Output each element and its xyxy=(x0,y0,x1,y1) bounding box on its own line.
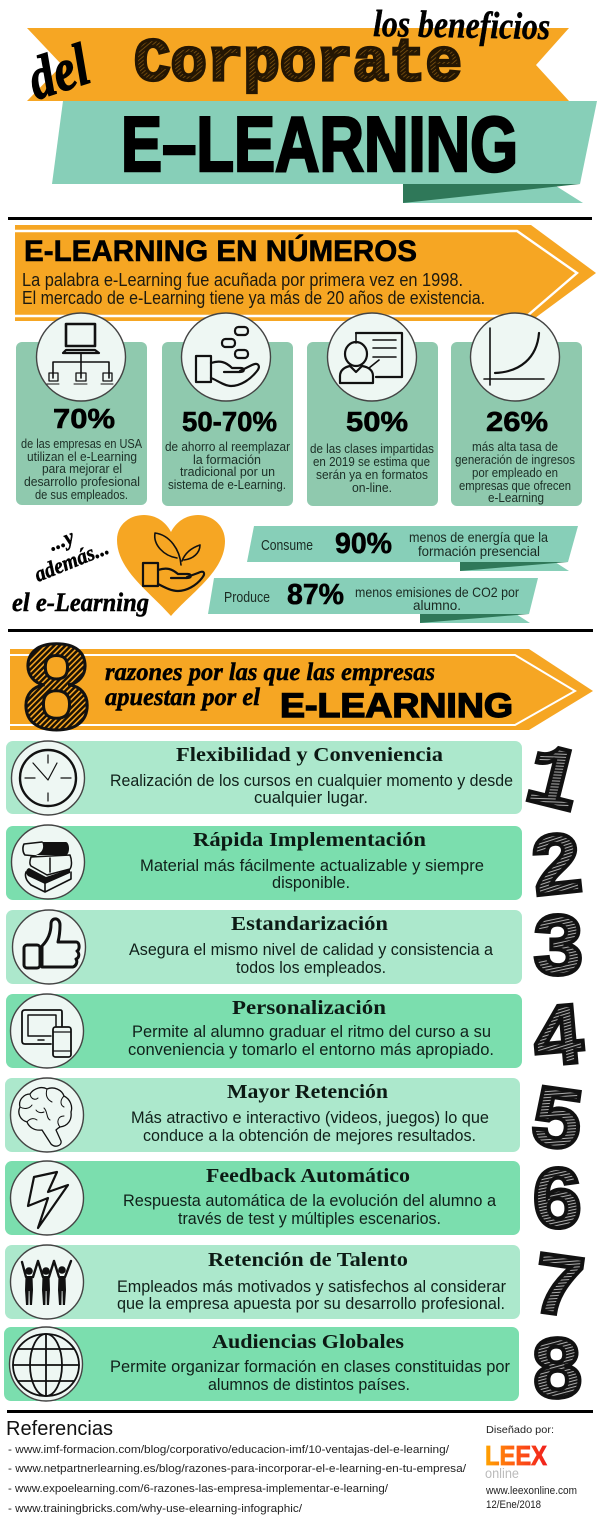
description xyxy=(165,440,290,492)
ribbon: produce 87%: 87% xyxy=(287,579,344,611)
description: Más atractivo e interactivo (videos, juegos) lo que xyxy=(131,1109,489,1127)
icon: hand holding plant xyxy=(143,533,204,591)
ribbon: consume 90% xyxy=(247,526,578,571)
icon: cheering team xyxy=(10,1245,84,1319)
orange ribbon xyxy=(27,28,569,101)
number 3: 3 xyxy=(532,902,584,1001)
icon: clock xyxy=(12,741,84,815)
reference list: - www.expoelearning.com/6-razones-las-empresa-implementar-e-learning/ xyxy=(8,1483,389,1495)
percentage: 50% xyxy=(346,406,408,437)
section heading script: apuestan por el xyxy=(105,684,260,711)
heading: Mayor Retención xyxy=(227,1081,388,1103)
section heading script xyxy=(105,659,435,711)
number 2: 2 xyxy=(526,818,588,922)
description: más alta tasa de xyxy=(472,440,558,454)
icon: brain xyxy=(10,1078,84,1152)
divider xyxy=(7,1410,593,1413)
icon: devices xyxy=(10,994,84,1068)
description xyxy=(131,1109,489,1145)
description: Realización de los cursos en cualquier momento y desde xyxy=(110,772,513,790)
section: 8 razones xyxy=(10,619,593,755)
logo: LEEX online: LEEX xyxy=(485,1440,547,1471)
description: Empleados más motivados y satisfechos al considerar xyxy=(117,1278,506,1296)
percentage: 50-70% xyxy=(182,406,277,437)
description xyxy=(117,1278,506,1313)
designer credit: Diseñado por: xyxy=(486,1425,554,1436)
reason 5 xyxy=(5,1078,520,1152)
description: todos los empleados. xyxy=(236,959,386,977)
reference list: - www.trainingbricks.com/why-use-elearning-infographic/ xyxy=(8,1503,303,1515)
orange arrow banner xyxy=(10,649,593,730)
ribbon: consume 90%: 90% xyxy=(335,528,392,560)
description xyxy=(129,941,494,977)
icon: teacher at board xyxy=(328,313,416,401)
dark ribbon fold xyxy=(403,184,580,203)
intro text: La palabra e-Learning fue acuñada por primera vez en 1998. xyxy=(22,270,463,290)
description: disponible. xyxy=(272,874,350,892)
description: en 2019 se estima que xyxy=(313,455,430,469)
designer credit: 12/Ene/2018 xyxy=(486,1499,541,1511)
reason 8 xyxy=(4,1327,519,1401)
logo: LEEX online: online xyxy=(485,1466,519,1481)
heading: Rápida Implementación xyxy=(193,829,426,851)
section: e-learning en numeros xyxy=(15,225,596,321)
description: de las clases impartidas xyxy=(310,442,434,456)
heading: Personalización xyxy=(232,997,386,1019)
ribbon: produce 87%: Produce xyxy=(224,590,270,606)
title: del: del xyxy=(20,31,97,112)
number 6: 6 xyxy=(531,1155,583,1254)
references xyxy=(6,1418,467,1515)
reference list: - www.imf-formacion.com/blog/corporativo/educacion-imf/10-ventajas-del-e-learning/ xyxy=(8,1444,450,1456)
designer credit: www.leexonline.com xyxy=(485,1485,577,1497)
heading: Retención de Talento xyxy=(208,1249,408,1271)
description xyxy=(128,1023,494,1059)
number 4: 4 xyxy=(528,990,589,1093)
reason 4 xyxy=(6,994,522,1068)
description: de las empresas en USA xyxy=(21,437,143,451)
description xyxy=(310,442,434,495)
script: ...y además... el e-Learning: ...y xyxy=(45,524,77,556)
description xyxy=(455,440,575,505)
arrow white inner line xyxy=(10,655,575,725)
stat card: 26% xyxy=(451,313,582,506)
description: de ahorro al reemplazar xyxy=(165,440,290,454)
ribbon: produce 87% xyxy=(208,578,538,623)
description: que la empresa apuesta por su desarrollo profesional. xyxy=(117,1295,505,1313)
description: sistema de e-Learning. xyxy=(168,478,286,492)
icon: lightning bolt xyxy=(10,1161,84,1235)
description xyxy=(110,1358,510,1394)
description: Respuesta automática de la evolución del alumno a xyxy=(123,1192,497,1210)
reference list: - www.netpartnerlearning.es/blog/razones-para-incorporar-el-e-learning-en-tu-empresa/ xyxy=(8,1463,467,1475)
heading: Flexibilidad y Conveniencia xyxy=(176,744,443,766)
title banner xyxy=(20,3,597,203)
references heading: Referencias xyxy=(6,1418,113,1440)
divider xyxy=(8,217,592,220)
description xyxy=(140,857,484,892)
script: ...y además... el e-Learning: el e-Learning xyxy=(12,588,149,617)
title: los beneficios: los beneficios xyxy=(373,3,551,48)
description: e-Learning xyxy=(488,491,544,505)
heart with plant icon xyxy=(117,515,225,616)
heading: Estandarización xyxy=(231,913,388,935)
section heading: E-LEARNING EN NÚMEROS xyxy=(24,234,417,268)
description xyxy=(123,1192,497,1228)
reason 2 xyxy=(6,825,522,900)
ribbon: consume 90%: formación presencial xyxy=(418,543,540,559)
ribbon: consume 90%: Consume xyxy=(261,538,313,554)
percentage: 70% xyxy=(53,403,115,434)
stat card: 50-70% xyxy=(162,313,293,506)
description: conveniencia y tomarlo el entorno más apropiado. xyxy=(128,1041,494,1059)
icon: growth curve xyxy=(470,313,560,401)
reason 3 xyxy=(6,910,522,984)
icon: computer network xyxy=(36,313,126,401)
description: utilizan el e-Learning xyxy=(27,450,137,464)
script: ...y además... el e-Learning: además... xyxy=(31,534,112,587)
icon: thumbs up xyxy=(12,910,86,984)
icon: globe xyxy=(10,1327,82,1401)
number 1: 1 xyxy=(515,729,590,838)
description: empresas que ofrecen xyxy=(459,479,571,493)
description: cualquier lugar. xyxy=(254,789,368,807)
description: Asegura el mismo nivel de calidad y consistencia a xyxy=(129,941,494,959)
icon: hand with coins xyxy=(182,313,270,401)
teal ribbon xyxy=(52,101,597,184)
number 7: 7 xyxy=(525,1239,591,1344)
description: por empleado en xyxy=(472,466,558,480)
description: Material más fácilmente actualizable y siempre xyxy=(140,857,484,875)
ribbon: produce 87%: alumno. xyxy=(413,597,461,613)
script: ...y además... el e-Learning xyxy=(12,524,149,617)
ribbon: produce 87%: menos emisiones de CO2 por xyxy=(355,584,519,600)
reason 1 xyxy=(6,741,522,815)
description: tradicional por un xyxy=(180,465,275,479)
reason 6 xyxy=(5,1161,520,1235)
logo: LEEX online xyxy=(485,1440,547,1481)
description: para mejorar el xyxy=(42,462,122,476)
orange arrow banner xyxy=(15,225,596,321)
teal ribbon tail xyxy=(403,186,583,203)
description: de sus empleados. xyxy=(35,488,128,502)
heading: Feedback Automático xyxy=(206,1165,410,1187)
description: generación de ingresos xyxy=(455,453,575,467)
reference list xyxy=(8,1444,467,1515)
description xyxy=(110,772,513,807)
intro text xyxy=(22,270,485,308)
title: Corporate: Corporate xyxy=(134,31,462,99)
description: desarrollo profesional xyxy=(24,475,140,489)
description: alumnos de distintos países. xyxy=(208,1376,410,1394)
ribbon: consume 90%: menos de energía que la xyxy=(409,529,548,545)
description: Permite organizar formación en clases constituidas por xyxy=(110,1358,510,1376)
heading: Audiencias Globales xyxy=(212,1331,404,1353)
icon: books xyxy=(12,825,84,899)
percentage: 26% xyxy=(486,406,548,437)
description: través de test y múltiples escenarios. xyxy=(178,1210,441,1228)
description: on-line. xyxy=(352,481,392,495)
reason 7 xyxy=(5,1245,520,1319)
description: conduce a la obtención de mejores resultados. xyxy=(143,1127,476,1145)
description: Permite al alumno graduar el ritmo del curso a su xyxy=(132,1023,491,1041)
stat card: 70% xyxy=(16,313,147,505)
intro text: El mercado de e-Learning tiene ya más de 20 años de existencia. xyxy=(22,288,485,308)
section heading script: razones por las que las empresas xyxy=(105,659,435,686)
description xyxy=(21,437,143,502)
big hatched 8: 8 xyxy=(22,619,91,755)
stat card: 50% xyxy=(307,313,438,506)
description: serán ya en formatos xyxy=(316,468,428,482)
number 5: 5 xyxy=(524,1072,590,1177)
designer credit xyxy=(485,1425,577,1511)
description: la formación xyxy=(193,453,261,467)
section heading bold: E-LEARNING xyxy=(280,687,513,725)
divider xyxy=(8,629,593,632)
number 8: 8 xyxy=(529,1324,586,1425)
arrow white inner line xyxy=(15,231,577,316)
